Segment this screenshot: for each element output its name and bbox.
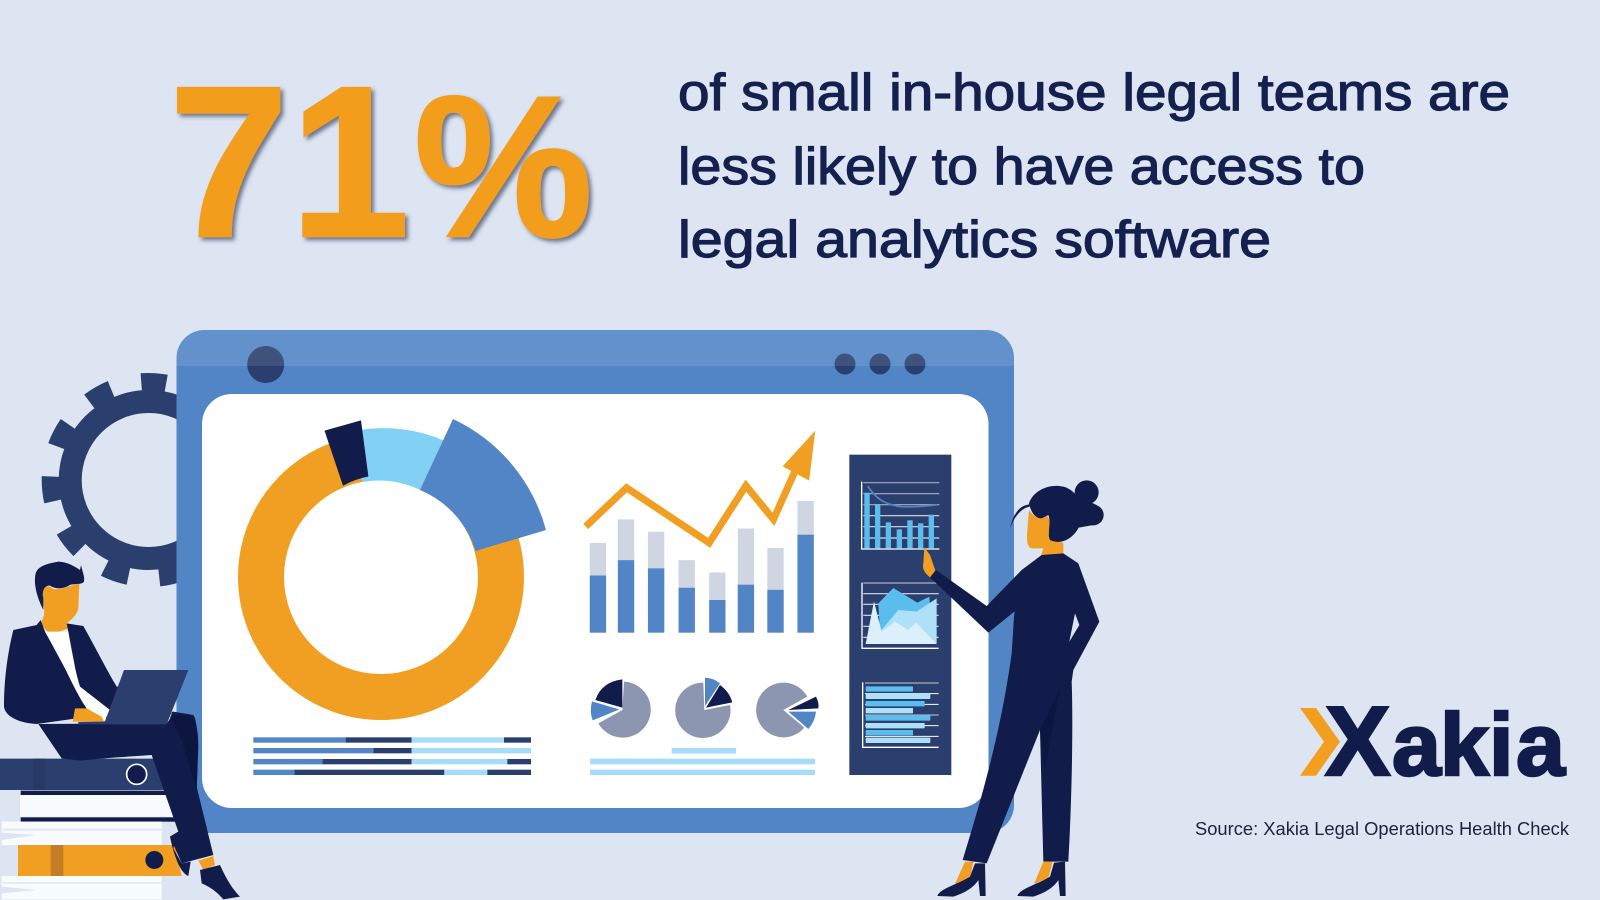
- headline statistic: 71%: 1: [290, 41, 410, 282]
- statement text block: legal analytics software: [678, 211, 1271, 269]
- icon: gear: [45, 376, 253, 584]
- mini bar chart: [862, 482, 939, 549]
- stacked bar legend under donut: [253, 737, 531, 775]
- logo: Xakia: [1300, 686, 1566, 796]
- statement text block: less likely to have access to: [678, 138, 1365, 196]
- logo: Xakia: i: [1489, 695, 1513, 794]
- logo: Xakia: k: [1440, 695, 1490, 794]
- donut chart: [261, 419, 546, 697]
- panel: side dashboard: [849, 455, 951, 775]
- logo: Xakia: X: [1325, 686, 1390, 796]
- figure: man with laptop: [4, 562, 240, 899]
- panel: browser window: [176, 330, 1014, 833]
- mini horizontal bar chart: [863, 682, 939, 747]
- headline statistic: 71%: %: [414, 54, 593, 279]
- source note: Source: Xakia Legal Operations Health Check: [1195, 818, 1570, 839]
- figure: stack of books and binders: [0, 759, 182, 899]
- statement text block: [678, 64, 1510, 269]
- logo: Xakia: a: [1392, 695, 1442, 794]
- headline statistic: 71%: 7: [169, 41, 289, 282]
- statement text block: of small in-house legal teams are: [678, 64, 1510, 122]
- logo: Xakia: a: [1516, 695, 1566, 794]
- mini area chart: [862, 583, 939, 648]
- bar chart with trend arrow: [586, 431, 815, 633]
- pie charts: [590, 678, 819, 775]
- figure: woman pointing at dashboard: [923, 480, 1104, 897]
